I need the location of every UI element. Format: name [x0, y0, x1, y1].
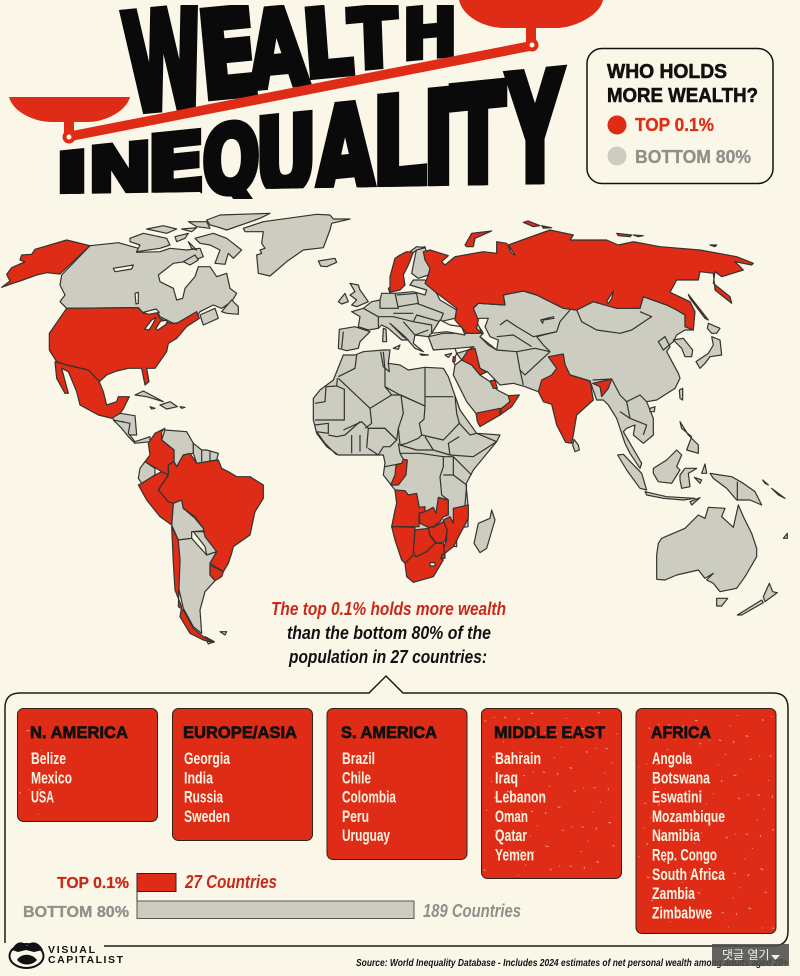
panel: s. america: Uruguay — [342, 827, 391, 845]
panel: europe/asia: Russia — [184, 788, 224, 806]
title word: inequality: Y — [507, 40, 563, 225]
panel: s. america: Brazil — [342, 750, 375, 768]
panel: s. america — [327, 708, 467, 860]
map: south america — [113, 420, 263, 644]
title word: inequality: L — [372, 68, 427, 222]
icon: tilted balance scale — [9, 0, 603, 144]
africa: northern and central countries — [313, 350, 500, 547]
panel: n. america: N. AMERICA — [30, 723, 128, 742]
panel: middle east — [482, 708, 622, 878]
legend: who holds more wealth: WHO HOLDS — [607, 61, 727, 83]
subtitle text: The top 0.1% holds more wealth — [271, 599, 506, 619]
panel: n. america — [18, 708, 158, 822]
panel: europe/asia: India — [184, 770, 214, 788]
subtitle text: population in 27 countries: — [288, 647, 487, 667]
panel: africa: Eswatini — [652, 788, 702, 806]
overlay button — [712, 944, 789, 966]
panel: africa: Zimbabwe — [652, 904, 712, 922]
panel: africa: Rep. Congo — [652, 846, 717, 864]
panel: africa: Mozambique — [652, 808, 725, 826]
panel: africa: AFRICA — [651, 723, 711, 742]
title word: inequality: Q — [202, 104, 260, 218]
subtitle text: than the bottom 80% of the — [287, 623, 491, 643]
panel: africa: Namibia — [652, 827, 701, 845]
panel outline with pointer — [5, 676, 788, 946]
title word: inequality: T — [451, 55, 505, 222]
panel: africa: Zambia — [652, 885, 696, 903]
panel: n. america: Belize — [31, 750, 66, 768]
title word: inequality: I — [54, 138, 90, 212]
panel: s. america: S. AMERICA — [341, 723, 437, 742]
panel: europe/asia: Sweden — [184, 808, 230, 826]
title word: inequality: U — [255, 94, 317, 219]
bar chart: countries count: TOP 0.1% — [57, 875, 129, 892]
legend: who holds more wealth: TOP 0.1% — [635, 115, 714, 135]
panel: middle east: Lebanon — [495, 788, 546, 806]
map: oceania and islands — [474, 422, 787, 615]
bar chart: countries count — [23, 872, 521, 921]
logo: visual capitalist: VISUAL — [48, 944, 96, 956]
panel: middle east: MIDDLE EAST — [494, 723, 606, 742]
panel: s. america: Peru — [342, 808, 369, 826]
panel: n. america: Mexico — [31, 770, 72, 788]
title word: inequality: E — [147, 114, 205, 215]
overlay button: 댓글 열기 — [722, 948, 770, 962]
panel: africa: Botswana — [652, 770, 711, 788]
panel: middle east: Oman — [495, 808, 528, 826]
title word: wealth — [118, 5, 454, 114]
map: europe — [338, 280, 457, 357]
title word: inequality: A — [316, 80, 374, 221]
title word: inequality: I — [423, 65, 454, 221]
panel: europe/asia: Georgia — [184, 750, 231, 768]
bar chart: countries count: 189 Countries — [423, 901, 521, 921]
panel: n. america: USA — [31, 788, 54, 806]
title word: inequality: N — [87, 128, 153, 215]
panel: europe/asia: EUROPE/ASIA — [183, 723, 297, 742]
panel: middle east: Qatar — [495, 827, 527, 845]
panel: s. america: Colombia — [342, 788, 397, 806]
panel: middle east: Bahrain — [495, 750, 541, 768]
panel: s. america: Chile — [342, 770, 371, 788]
bar chart: countries count: 27 Countries — [184, 872, 277, 892]
panel: africa: Angola — [652, 750, 693, 768]
logo: visual capitalist: CAPITALIST — [48, 954, 124, 966]
map: asia — [390, 221, 753, 468]
panel: africa — [636, 708, 776, 934]
bar chart: countries count: BOTTOM 80% — [23, 904, 129, 921]
legend: who holds more wealth: BOTTOM 80% — [635, 147, 751, 167]
world map — [2, 213, 787, 644]
africa: southern countries — [385, 443, 472, 582]
title: wealth inequality — [60, 5, 568, 199]
map: africa — [313, 350, 500, 582]
panel: middle east: Iraq — [495, 770, 518, 788]
title word: inequality — [60, 64, 568, 199]
legend: who holds more wealth: MORE WEALTH? — [607, 85, 758, 107]
map: north america — [2, 213, 350, 435]
panel: middle east: Yemen — [495, 846, 534, 864]
panel: europe/asia — [172, 708, 312, 840]
subtitle text — [271, 599, 506, 667]
legend: who holds more wealth — [587, 48, 773, 184]
panel: africa: South Africa — [652, 866, 726, 884]
logo: visual capitalist — [10, 942, 124, 968]
